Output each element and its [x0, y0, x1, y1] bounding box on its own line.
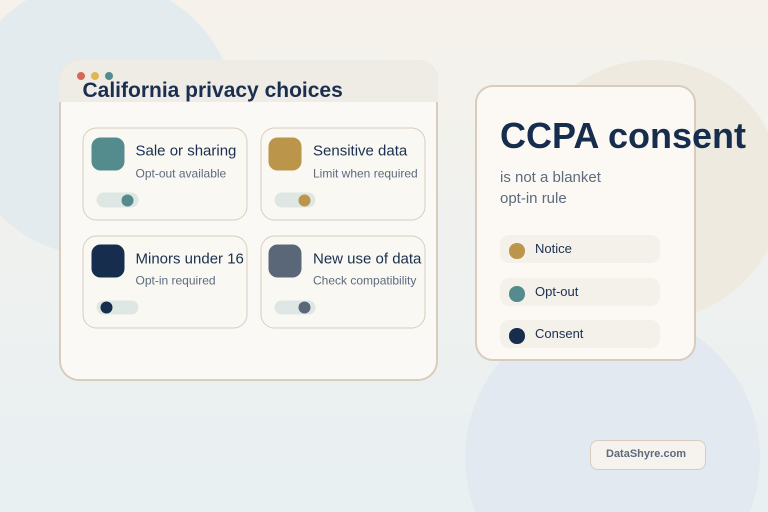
card title: New use of data — [313, 250, 421, 267]
toggle — [96, 300, 138, 314]
card: Sale or sharing — [82, 128, 248, 220]
toggle — [96, 192, 138, 207]
toggle — [274, 192, 316, 207]
icon: navy square — [91, 244, 124, 278]
legend label: Opt-out — [535, 284, 578, 299]
toggle — [274, 300, 316, 314]
legend label: Notice — [535, 241, 572, 256]
card subtitle: Opt-in required — [136, 274, 216, 288]
legend dot — [509, 286, 524, 302]
legend dot — [509, 243, 524, 258]
subheading: is not a blanket — [500, 169, 601, 186]
legend label: Consent — [535, 326, 583, 341]
panel: California privacy choices — [59, 60, 438, 381]
legend dot — [509, 328, 524, 344]
footer badge: DataShyre.com — [590, 440, 706, 470]
legend row: Notice — [500, 235, 660, 263]
card title: Sensitive data — [313, 142, 407, 160]
window dots — [77, 72, 113, 80]
card title: Sale or sharing — [136, 142, 236, 160]
card subtitle: Opt-out available — [136, 166, 226, 180]
icon: slate square — [268, 244, 302, 278]
card subtitle: Check compatibility — [313, 274, 416, 288]
icon: gold square — [268, 137, 302, 170]
legend row: Opt-out — [500, 278, 660, 306]
panel: CCPA consent — [475, 85, 696, 361]
main heading: CCPA consent — [500, 115, 746, 156]
card title: Minors under 16 — [136, 250, 244, 267]
card: Sensitive data — [260, 128, 425, 220]
panel header bar — [59, 60, 438, 102]
card: New use of data — [260, 235, 425, 328]
panel heading: California privacy choices — [82, 79, 343, 102]
card subtitle: Limit when required — [313, 166, 418, 180]
subheading: opt-in rule — [500, 190, 567, 207]
badge text: DataShyre.com — [606, 448, 686, 460]
legend row: Consent — [500, 320, 660, 348]
card: Minors under 16 — [82, 235, 248, 328]
icon: teal square — [91, 137, 124, 170]
subheading — [500, 169, 601, 207]
